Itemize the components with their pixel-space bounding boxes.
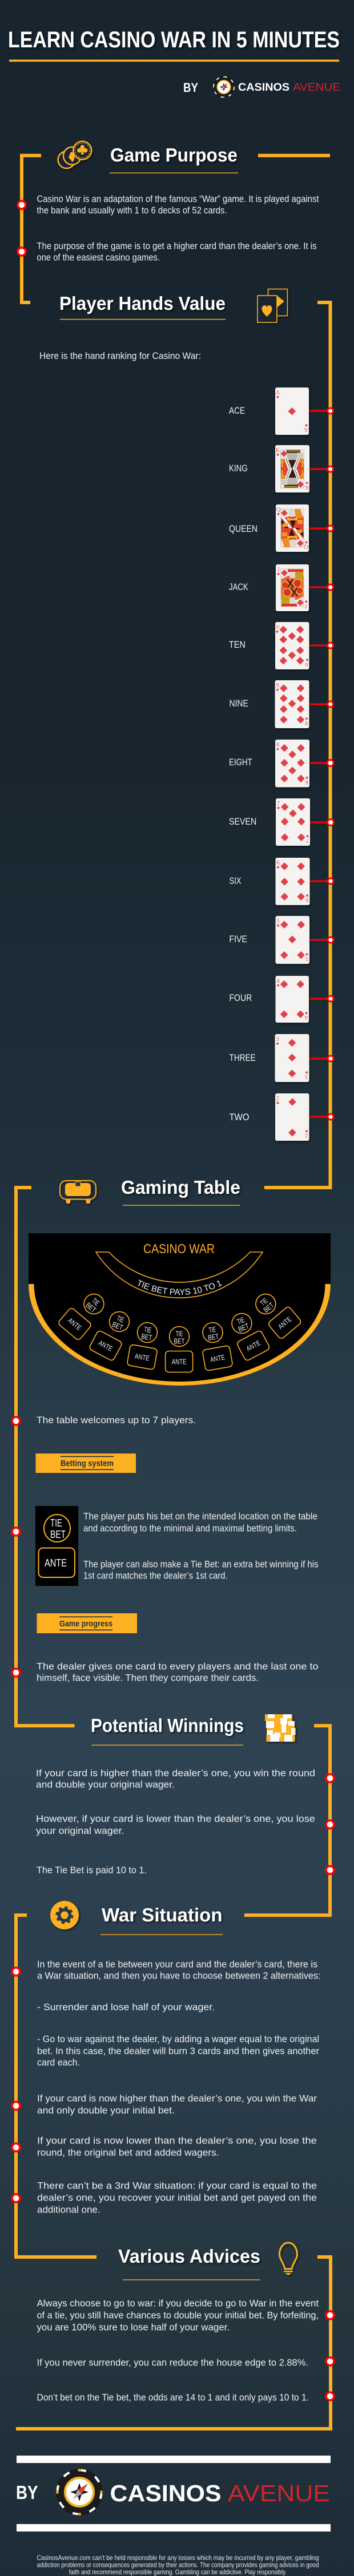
war paragraph: tie event: a War situation, and then you have to choose between 2 alternatives: [37,1971,321,1981]
advice 1: Always choose to go to war: if you decide to go to War in the event [37,2299,319,2309]
casino war table diagram: ANTE [245,1339,262,1353]
winnings paragraph 3: The Tie Bet is paid 10 to 1. [37,1865,147,1875]
betting paragraph 1 [83,1511,317,1534]
rank row: queen: QUEEN [229,523,258,534]
bullet [326,2357,334,2365]
bullet [12,1417,20,1425]
winnings paragraph 1: If your card is higher than the dealer’s one, you win the round [36,1768,315,1778]
intro text: hand ranking: Here is the hand ranking for Casino War: [39,351,201,361]
rank row: seven: SEVEN [229,816,256,827]
header brand: by Casinos Avenue [183,76,340,98]
rank row: four: 4 [276,978,280,984]
rank row: king: KING [229,463,248,474]
advice 3: Don’t bet on the Tie bet, the odds are 14 to 1 and it only pays 10 to 1. [37,2392,309,2403]
header brand: by Casinos Avenue: BY [183,80,198,95]
rank row: six: 6 [305,897,309,903]
casino war table diagram: ANTE [172,1358,187,1366]
casino war table diagram: BET [84,1301,98,1314]
bullet [326,2392,334,2400]
winnings paragraph 1 [36,1768,315,1790]
advice 1 [37,2299,319,2333]
rank row: two: TWO [230,1112,249,1123]
heading: Various Advices: Various Advices [118,2246,260,2267]
game purpose paragraph 1: Casino War is an adaptation of the famous “War” game. It is played against [37,194,319,204]
bullet [12,2194,20,2202]
rank row: queen [229,504,333,552]
rank row: king [229,445,333,492]
war outcome: lower [37,2135,317,2158]
bullet [326,1820,334,1828]
button: Game progress: Game progress [59,1619,112,1629]
footer brand block: AVENUE [228,2480,330,2506]
casino war table diagram: TIE [115,1314,126,1325]
rank row: nine: NINE [230,698,248,709]
rank row: four: FOUR [230,992,252,1003]
casino war table diagram: ANTE [97,1339,114,1353]
rank row: ace: A [304,426,308,433]
rank row: ten [229,622,333,669]
war outcome: third war: dealer’s one, you recover your initial bet and get payed on the [37,2193,317,2203]
casino war table diagram: ANTE [134,1352,150,1363]
rank row: eight: EIGHT [229,757,252,768]
disclaimer: faith and recommend responsible gaming. Gambling can be addictive. Play responsibly. [69,2568,287,2576]
rank row: ten: 10 [305,661,308,667]
war outcome: higher: If your card is now higher than the dealer’s one, you win the War [37,2093,317,2103]
rank row: four [230,976,333,1023]
war option: go to war: card each. [37,2058,80,2068]
button: Betting system: Betting system [61,1459,114,1468]
casino war table diagram: BET [262,1301,276,1314]
disclaimer: CasinosAvenue.com can’t be held responsible for any losses which may be incurred by any player, gambling [37,2554,319,2562]
icon: chip stack [265,1714,296,1742]
war outcome: lower: round, the original bet and added wagers. [37,2148,219,2158]
betting paragraph 2 [83,1559,319,1581]
rank row: ten: 10 [276,624,279,631]
winnings paragraph 2 [36,1814,315,1836]
rank row: jack [229,564,333,611]
heading: Game Purpose: Game Purpose [110,144,238,165]
war option: go to war [37,2034,319,2068]
casino war table diagram: ANTE [210,1353,226,1364]
winnings paragraph 2: However, if your card is lower than the dealer’s one, you lose [36,1814,315,1824]
war outcome: third war [37,2181,317,2215]
rank row: jack: JACK [229,582,248,592]
war option: go to war: bet. In this case, the dealer will burn 3 cards and then gives another [37,2046,319,2057]
bullet [18,248,26,256]
casino war table diagram: BET [111,1320,124,1332]
rank row: nine [230,680,333,728]
game progress paragraph: The dealer gives one card to every players and the last one to [37,1662,319,1672]
rank row: eight: 8 [305,778,308,785]
rank row: four: 4 [304,1014,308,1020]
rank row: six [230,858,333,905]
bullet [12,2102,20,2110]
game purpose paragraph 2: one of the easiest casino games. [37,252,160,263]
betting paragraph 1: and according to the minimal and maximal betting limits. [83,1524,297,1534]
bullet [12,1968,20,1976]
war outcome: higher [37,2093,317,2116]
casino war table diagram [29,1233,331,1386]
casino war table diagram: TIE BET PAYS 10 TO 1 [138,1279,222,1295]
bet spots illustration: BET [50,1529,66,1540]
bullet [326,1774,334,1782]
game purpose paragraph 2: The purpose of the game is to get a higher card than the dealer’s one. It is [37,241,316,251]
casino war table diagram: TIE [176,1330,183,1338]
advice 2: If you never surrender, you can reduce the house edge to 2.88%. [37,2358,308,2368]
rank row: king: K [304,484,309,490]
advice 1: you are 100% sure to lose half of your wager. [37,2323,230,2333]
bullet [326,1866,334,1874]
timeline connector: game purpose bracket [22,155,330,302]
rank row: ace [229,387,333,435]
rank row: five: 5 [276,918,280,924]
rank row: queen: Q [276,507,281,513]
heading: Potential Winnings: Potential Winnings [91,1715,244,1736]
casino war table diagram: CASINO WAR [143,1241,215,1256]
bullet [18,201,26,209]
icon: light bulb [280,2243,297,2275]
timeline connector: potential winnings bracket [244,1726,330,1915]
rank row: six: 6 [276,860,280,866]
game purpose paragraph 1 [37,194,319,216]
betting paragraph 2: The player can also make a Tie Bet: an extra bet winning if his [83,1559,319,1569]
rank row: ace: ACE [229,405,245,416]
war outcome: lower: If your card is now lower than the dealer’s one, you lose the [37,2135,317,2146]
war option: go to war: - Go to war against the dealer, by adding a wager equal to the original [37,2034,319,2044]
icon: gear [50,1901,79,1929]
war option: surrender: - Surrender and lose half of your wager. [37,2002,215,2012]
casino war table diagram: TIE [143,1325,152,1334]
heading: Gaming Table: Gaming Table [121,1177,240,1198]
footer brand block [16,2456,331,2531]
bet spots illustration: ANTE [45,1557,67,1569]
casino war table diagram: TIE [208,1325,216,1334]
table capacity text: The table welcomes up to 7 players. [37,1415,196,1426]
war paragraph: tie event: In the event of a tie between your card and the dealer’s card, there is [37,1960,317,1970]
bet spots illustration [35,1506,78,1586]
rank row: two: 2 [276,1096,279,1102]
icon: casino table [60,1181,96,1204]
rank row: three: THREE [230,1052,256,1063]
rank row: eight: 8 [276,742,279,748]
game purpose paragraph 2 [37,241,316,263]
icon: poker chips [58,142,91,168]
casino war table diagram: BET [140,1332,152,1342]
rank row: five [230,916,333,964]
betting paragraph 1: The player puts his bet on the intended location on the table [83,1511,317,1521]
war outcome: third war: additional one. [37,2205,100,2215]
bullet [12,2143,20,2151]
rank row: ten: TEN [229,639,246,650]
header brand: by Casinos Avenue: CASINOS [238,82,289,94]
rank row: jack: J [277,567,280,573]
rank row: three: 3 [276,1036,279,1043]
bet spots illustration: TIE [50,1517,62,1529]
rank row: king: K [276,447,280,454]
rank row: seven: 7 [306,837,309,843]
advice 1: of a tie, you still have chances to double your initial bet. By forfeiting, [37,2310,319,2320]
winnings paragraph 1: and double your original wager. [36,1779,175,1790]
casino war table diagram: TIE [259,1296,269,1307]
footer brand block: CASINOS [110,2480,222,2506]
footer brand block: BY [16,2482,38,2503]
casino war table diagram: TIE [236,1315,246,1326]
rank row: five: 5 [305,955,308,962]
rank row: eight [229,740,333,788]
game progress paragraph: himself, face visible. Then they compare their cards. [37,1673,259,1683]
game purpose paragraph 1: the bank and usually with 1 to 6 decks of 52 cards. [37,205,227,216]
rank row: seven [229,798,333,846]
betting paragraph 2: 1st card matches the dealer’s 1st card. [83,1570,227,1581]
casino war table diagram: TIE [90,1296,102,1307]
game progress paragraph [37,1662,319,1683]
casino war table diagram: ANTE [276,1315,293,1331]
winnings paragraph 2: your original wager. [36,1826,124,1836]
rank row: three: 3 [305,1073,308,1080]
rank row: six: SIX [230,875,241,886]
war outcome: third war: There can’t be a 3rd War situation: if your card is equal to the [37,2181,317,2191]
bullet [12,1669,20,1677]
rank row: jack: J [305,603,308,609]
heading: Player Hands Value: Player Hands Value [59,293,226,314]
rank row: nine: 9 [305,720,308,726]
timeline connector: war situation bracket [16,1915,96,2257]
timeline connector: player hands bracket [264,302,330,1188]
casino war table diagram: ANTE [66,1317,83,1332]
button: Game progress [37,1613,137,1633]
heading: War Situation: War Situation [102,1904,223,1925]
casino war table diagram: BET [174,1337,185,1346]
bullet [326,2311,334,2319]
rank row: seven: 7 [277,801,280,807]
rank row: three [230,1034,333,1082]
casino war table diagram: BET [237,1322,250,1334]
war paragraph: tie event [37,1960,321,1981]
timeline connector: gaming table bracket [16,1188,74,1726]
timeline connector: various advices bracket [16,2257,331,2429]
rank row: queen: Q [304,543,308,550]
header brand: by Casinos Avenue: AVENUE [293,82,340,94]
war outcome: higher: and only double your initial bet. [37,2106,175,2116]
rank row: two [230,1093,333,1141]
rank row: five: FIVE [230,934,247,944]
icon: playing cards [258,289,288,322]
button: Betting system [35,1453,136,1473]
bullet [12,1528,20,1536]
rank row: two: 2 [305,1132,308,1138]
rank row: ace: A [276,390,280,396]
casino war table diagram: BET [207,1332,219,1342]
disclaimer [37,2554,319,2576]
rank row: nine: 9 [276,683,279,689]
